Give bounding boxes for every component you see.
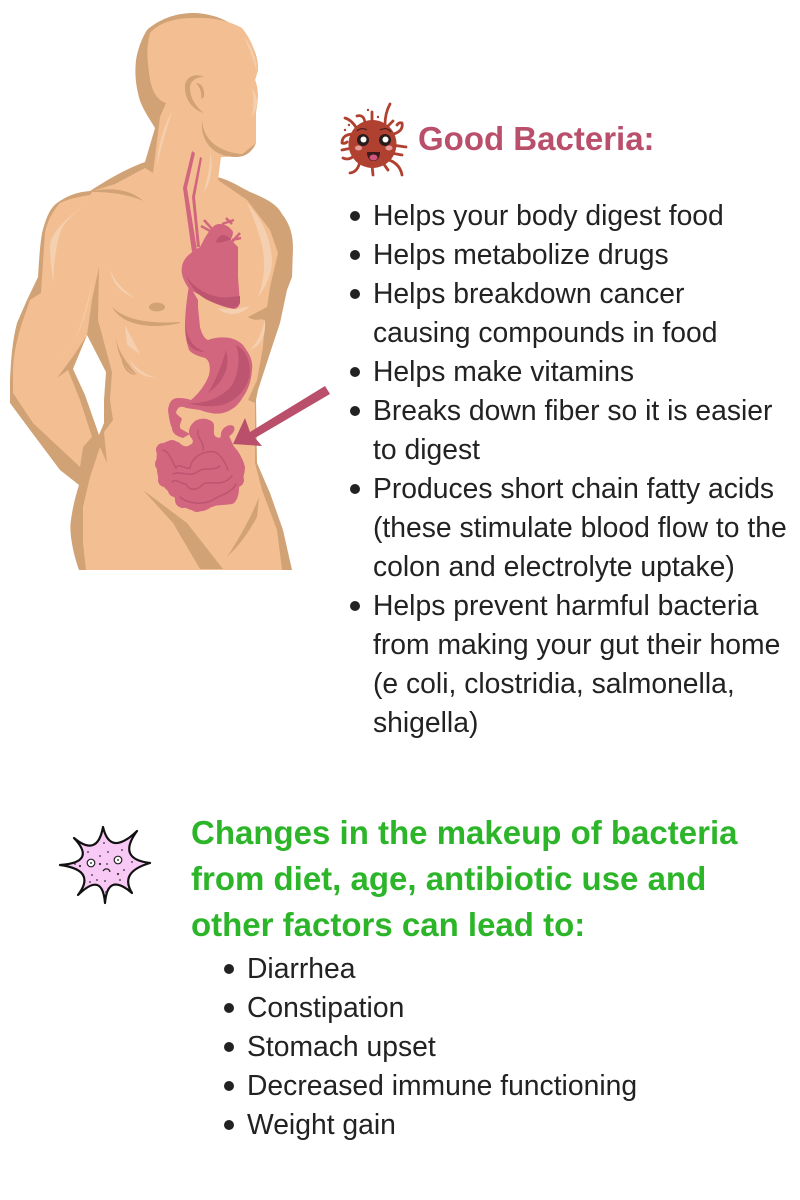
esophagus tubes bbox=[183, 151, 197, 252]
gap between arm and torso bbox=[73, 335, 106, 435]
list: benefits of good bacteria: (these stimulate blood flow to the bbox=[373, 511, 787, 543]
list: benefits of good bacteria: Produces short chain fatty acids bbox=[373, 472, 774, 504]
aortic branches bbox=[201, 218, 241, 245]
heading: changes in the makeup of bacteria bbox=[191, 814, 738, 943]
list: benefits of good bacteria: shigella) bbox=[373, 706, 478, 738]
speckles bbox=[74, 842, 133, 893]
body highlights bbox=[50, 37, 272, 377]
list: benefits of good bacteria: Helps make vitamins bbox=[373, 355, 634, 387]
list: effects of changed bacteria: Stomach upset bbox=[247, 1030, 436, 1062]
organs: esophagus, heart, stomach, intestine bbox=[155, 151, 252, 512]
list: effects of changed bacteria: Decreased immune functioning bbox=[247, 1069, 637, 1101]
esophagus to stomach bbox=[168, 285, 252, 438]
list: benefits of good bacteria: to digest bbox=[373, 433, 480, 465]
body silhouette bbox=[10, 13, 293, 570]
body skin fill bbox=[13, 18, 282, 570]
tentacles bbox=[342, 104, 406, 175]
list: benefits of good bacteria: Breaks down fiber so it is easier bbox=[373, 394, 772, 426]
icon: smiling red bacterium bbox=[340, 102, 408, 176]
cheeks bbox=[355, 146, 392, 150]
heading: changes in the makeup of bacteria: from diet, age, antibiotic use and bbox=[191, 860, 706, 897]
icon: pink star-shaped microbe bbox=[58, 826, 152, 904]
arrow pointing to intestine bbox=[233, 386, 330, 446]
heart bbox=[182, 224, 240, 309]
heading: changes in the makeup of bacteria: other factors can lead to: bbox=[191, 906, 585, 943]
list: benefits of good bacteria: causing compounds in food bbox=[373, 316, 718, 348]
list: benefits of good bacteria: (e coli, clostridia, salmonella, bbox=[373, 667, 735, 699]
list: benefits of good bacteria: Helps metabolize drugs bbox=[373, 238, 669, 270]
microbe body bbox=[60, 827, 150, 903]
illustration: human torso with digestive organs bbox=[10, 13, 330, 570]
heading: Good Bacteria: Good Bacteria: bbox=[418, 120, 655, 157]
eyes bbox=[87, 856, 122, 867]
small intestine bbox=[155, 420, 244, 512]
list: benefits of good bacteria: Helps your body digest food bbox=[373, 199, 724, 231]
list: benefits of good bacteria: Helps prevent harmful bacteria bbox=[373, 589, 758, 621]
mouth bbox=[367, 152, 380, 161]
list: effects of changed bacteria: Diarrhea bbox=[247, 952, 356, 984]
mouth bbox=[103, 869, 110, 872]
eyes bbox=[357, 129, 391, 146]
bacterium body bbox=[348, 120, 396, 168]
body shading and muscle lines bbox=[93, 75, 267, 569]
list: benefits of good bacteria: from making your gut their home bbox=[373, 628, 780, 660]
spores bbox=[344, 109, 379, 131]
list: benefits of good bacteria: Helps breakdown cancer bbox=[373, 277, 684, 309]
list: effects of changed bacteria: Constipation bbox=[247, 991, 404, 1023]
list: effects of changed bacteria: Weight gain bbox=[247, 1108, 396, 1140]
list: benefits of good bacteria bbox=[350, 199, 787, 738]
list: benefits of good bacteria: colon and electrolyte uptake) bbox=[373, 550, 735, 582]
list: effects of changed bacteria bbox=[224, 952, 637, 1140]
heading: changes in the makeup of bacteria: Changes in the makeup of bacteria bbox=[191, 814, 737, 851]
